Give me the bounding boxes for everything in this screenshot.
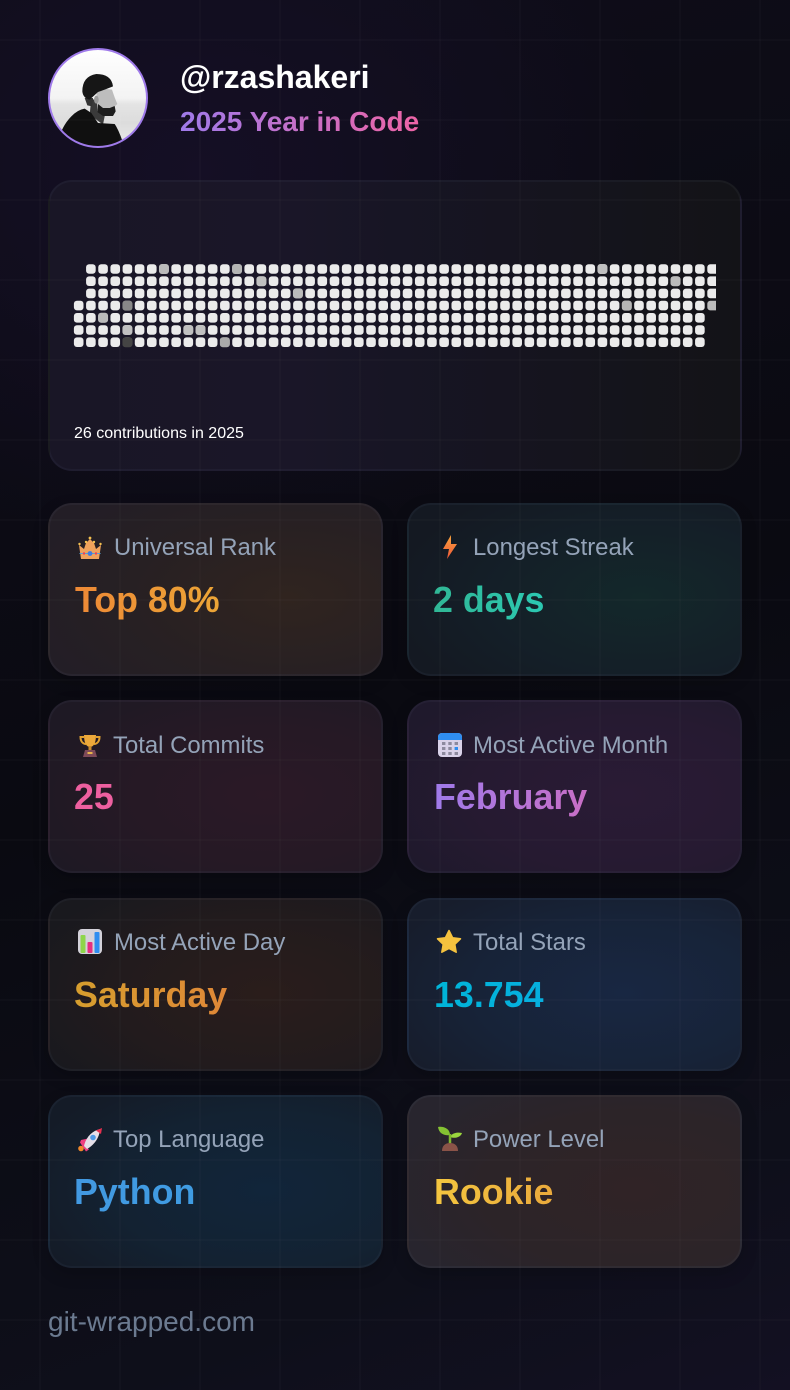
value (74, 975, 361, 1015)
value (433, 580, 720, 620)
subtitle: 2025 Year in Code (180, 106, 419, 137)
card: total stars (407, 898, 742, 1071)
card: power level (407, 1095, 742, 1268)
icon: bar chart (78, 929, 102, 954)
value (434, 975, 721, 1015)
value: Rookie (434, 1172, 553, 1212)
card: most active day (48, 898, 383, 1071)
label: Top Language (113, 1126, 264, 1153)
contribution heatmap (74, 264, 716, 348)
avatar (48, 48, 148, 148)
card: universal rank (48, 503, 383, 676)
icon: lightning bolt (443, 535, 457, 559)
label: Total Commits (113, 732, 264, 759)
icon: star (436, 930, 462, 953)
value (75, 580, 362, 620)
value: 13.754 (434, 975, 544, 1015)
panel: contribution graph (48, 180, 742, 471)
header (48, 48, 419, 148)
value: Python (74, 1172, 195, 1212)
icon: trophy (80, 735, 100, 757)
label: Total Stars (473, 929, 586, 956)
value (74, 1172, 361, 1212)
footer site name: git-wrapped.com (48, 1306, 255, 1337)
label: Power Level (473, 1126, 604, 1153)
card: total commits (48, 700, 383, 873)
icon: crown (78, 536, 102, 559)
value (434, 1172, 721, 1212)
value: 2 days (433, 580, 544, 620)
icon: calendar (438, 733, 462, 757)
value (74, 777, 361, 817)
card: top language (48, 1095, 383, 1268)
label: Longest Streak (473, 534, 634, 561)
card: most active month (407, 700, 742, 873)
value: Top 80% (75, 580, 220, 620)
value: Saturday (74, 975, 227, 1015)
username: @rzashakeri (180, 59, 370, 95)
label: Universal Rank (114, 534, 276, 561)
icon: rocket (78, 1128, 102, 1152)
card: longest streak (407, 503, 742, 676)
value: 25 (74, 777, 114, 817)
label: Most Active Month (473, 732, 668, 759)
value: February (434, 777, 587, 817)
icon: sprout (438, 1126, 462, 1151)
value (434, 777, 721, 817)
contribution caption: 26 contributions in 2025 (74, 425, 244, 442)
label: Most Active Day (114, 929, 285, 956)
